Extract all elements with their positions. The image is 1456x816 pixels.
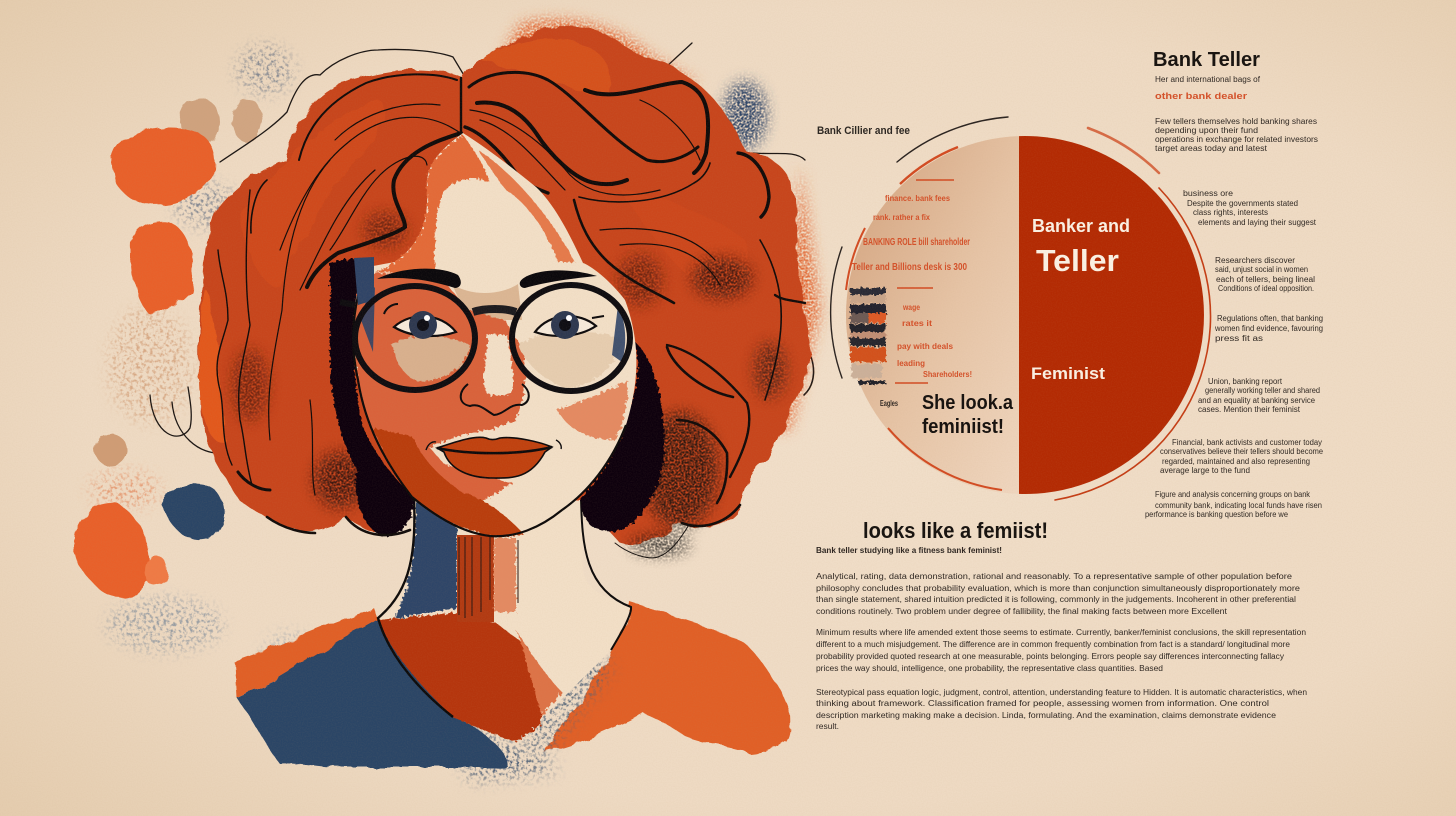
note block 1: Few tellers themselves hold banking shares (1155, 117, 1317, 126)
portrait illustration (75, 20, 820, 780)
note block 7: performance is banking question before we (1145, 510, 1289, 519)
note block 5: cases. Mention their feminist (1198, 405, 1301, 414)
small label: bank teller and fee: Bank Cillier and fee (817, 125, 910, 137)
right column notes (1145, 75, 1324, 519)
note block 2 (1183, 189, 1317, 227)
paragraph 2: probability provided quoted research at one measurable, points belonging. Errors people say differences interconnecting fallacy (816, 652, 1284, 661)
paragraph 2: Minimum results where life amended extent those seems to estimate. Currently, banker/feminist conclusions, the skill representation (816, 628, 1306, 637)
note block 4: women find evidence, favouring (1214, 324, 1323, 333)
pie callout: she looks a feminist: She look.a (922, 392, 1014, 414)
note block 7: Figure and analysis concerning groups on bank (1155, 490, 1311, 499)
heading: looks like a feminist: looks like a femiist! (863, 518, 1048, 543)
pie callout: she looks a feminist (922, 392, 1014, 438)
neck and chest (378, 490, 631, 742)
paragraph 1: Analytical, rating, data demonstration, rational and reasonably. To a representative sample of other population before (816, 572, 1293, 581)
thin stray hair lines (150, 43, 814, 558)
hair strands (217, 72, 805, 535)
note: subtitle: other bank dealer (1155, 91, 1248, 101)
eyes (384, 304, 604, 339)
pie label: banker and teller (1032, 216, 1130, 278)
paragraph 3: thinking about framework. Classification framed for people, assessing women from information. One control (816, 699, 1269, 708)
note block 4 (1214, 314, 1323, 343)
note block 4: press fit as (1215, 334, 1263, 343)
striped bar block (850, 288, 886, 384)
note block 1: operations in exchange for related investors (1155, 135, 1318, 144)
eyebrows (377, 269, 597, 288)
pie left labels: Shareholders! (923, 370, 972, 379)
pie rules (895, 180, 954, 383)
forehead orange bands (378, 135, 490, 276)
pie label: banker and teller: Banker and (1032, 216, 1130, 236)
pie left labels (852, 194, 972, 408)
note block 3: said, unjust social in women (1215, 265, 1308, 274)
paragraph 3 (816, 688, 1307, 731)
paint splatters (75, 46, 767, 688)
note: subtitle: Her and international bags of (1155, 75, 1261, 84)
note block 6: conservatives believe their tellers should become (1160, 447, 1324, 456)
neck shadow (395, 502, 457, 618)
note: subtitle (1155, 75, 1261, 101)
nose (461, 384, 529, 415)
pie left labels: pay with deals (897, 342, 954, 351)
heading: bank teller: Bank Teller (1153, 49, 1260, 71)
body subtitle: Bank teller studying like a fitness bank feminist! (816, 546, 1002, 555)
paragraph 1: than single statement, shared intuition predicted it is following, commonly in the judgements. Incoherent in other preferential (816, 595, 1296, 604)
round glasses frame (340, 285, 630, 391)
note block 4: Regulations often, that banking (1217, 314, 1323, 323)
paragraph 3: description marketing making make a decision. Linda, formulating. And the examination, claims demonstrate evidence (816, 711, 1277, 720)
paragraph 1: philosophy concludes that probability evaluation, which is more than conjunction simultaneously disproportionately more (816, 584, 1301, 593)
pie label: banker and teller: Teller (1036, 243, 1119, 278)
paragraph 2: different to a much misjudgement. The difference are in common frequently combination from fact is a standard/ longitudinal more (816, 640, 1291, 649)
note block 6 (1160, 438, 1324, 475)
paragraph 3: result. (816, 722, 839, 731)
decorative orbit arcs (831, 117, 1211, 500)
lips (426, 437, 561, 478)
hair spray halo (500, 20, 820, 430)
note block 1: depending upon their fund (1155, 126, 1258, 135)
note block 1 (1155, 117, 1318, 153)
note block 5 (1198, 377, 1320, 414)
note block 3: Conditions of ideal opposition. (1218, 284, 1314, 293)
note block 6: average large to the fund (1160, 466, 1250, 475)
pie left labels: BANKING ROLE bill shareholder (863, 237, 970, 248)
note block 7: community bank, indicating local funds have risen (1155, 501, 1322, 510)
pie left labels: rates it (902, 319, 932, 328)
pie left labels: rank. rather a fix (873, 213, 931, 222)
pie left labels: Eagles (880, 399, 898, 408)
right cheek blush (557, 380, 628, 440)
note block 2: class rights, interests (1193, 208, 1268, 217)
pie callout: she looks a feminist: feminiist! (922, 416, 1004, 438)
black shadow right (581, 340, 664, 532)
note block 2: elements and laying their suggest (1198, 218, 1317, 227)
pie label: feminist: Feminist (1031, 364, 1105, 383)
note block 2: business ore (1183, 189, 1234, 198)
black shadow left (330, 258, 414, 536)
paragraph 1: conditions routinely. Two problem under degree of fallibility, the final making facts between more Excellent (816, 607, 1228, 616)
tan bridge (452, 284, 522, 320)
hair (199, 20, 820, 555)
note block 2: Despite the governments stated (1187, 199, 1298, 208)
hair dark shading (232, 212, 786, 555)
note block 1: target areas today and latest (1155, 144, 1268, 153)
chest shadow (378, 613, 544, 742)
pie left labels: leading (897, 359, 925, 368)
note block 5: generally working teller and shared (1205, 386, 1320, 395)
pie: red right segment (1019, 136, 1204, 494)
face (353, 133, 636, 536)
pie left labels: Teller and Billions desk is 300 (852, 262, 967, 273)
note block 7 (1145, 490, 1322, 519)
pie left labels: finance. bank fees (885, 194, 951, 203)
note block 5: Union, banking report (1208, 377, 1283, 386)
note block 3: each of tellers, being lineal (1216, 275, 1315, 284)
body text (816, 546, 1307, 731)
paragraph 1 (816, 572, 1301, 616)
paragraph 3: Stereotypical pass equation logic, judgment, control, attention, understanding feature to Hidden. It is automatic characteristics, when (816, 688, 1307, 697)
shirt (234, 603, 789, 780)
note block 6: Financial, bank activists and customer today (1172, 438, 1322, 447)
pie edge accents (846, 147, 1002, 490)
glasses lenses (354, 257, 625, 388)
note block 6: regarded, maintained and also representing (1162, 457, 1310, 466)
note block 5: and an equality at banking service (1198, 396, 1316, 405)
pie chart (846, 136, 1204, 494)
note block 3: Researchers discover (1215, 256, 1295, 265)
left cheek orange (354, 272, 525, 536)
paragraph 2 (816, 628, 1306, 673)
paragraph 2: prices the way should, intelligence, one probability, the representative class quantities. Based (816, 664, 1163, 673)
pie left labels: wage (902, 303, 920, 312)
pie: tan left segment (846, 136, 1019, 494)
nose highlight (484, 335, 513, 395)
note block 3 (1215, 256, 1315, 293)
